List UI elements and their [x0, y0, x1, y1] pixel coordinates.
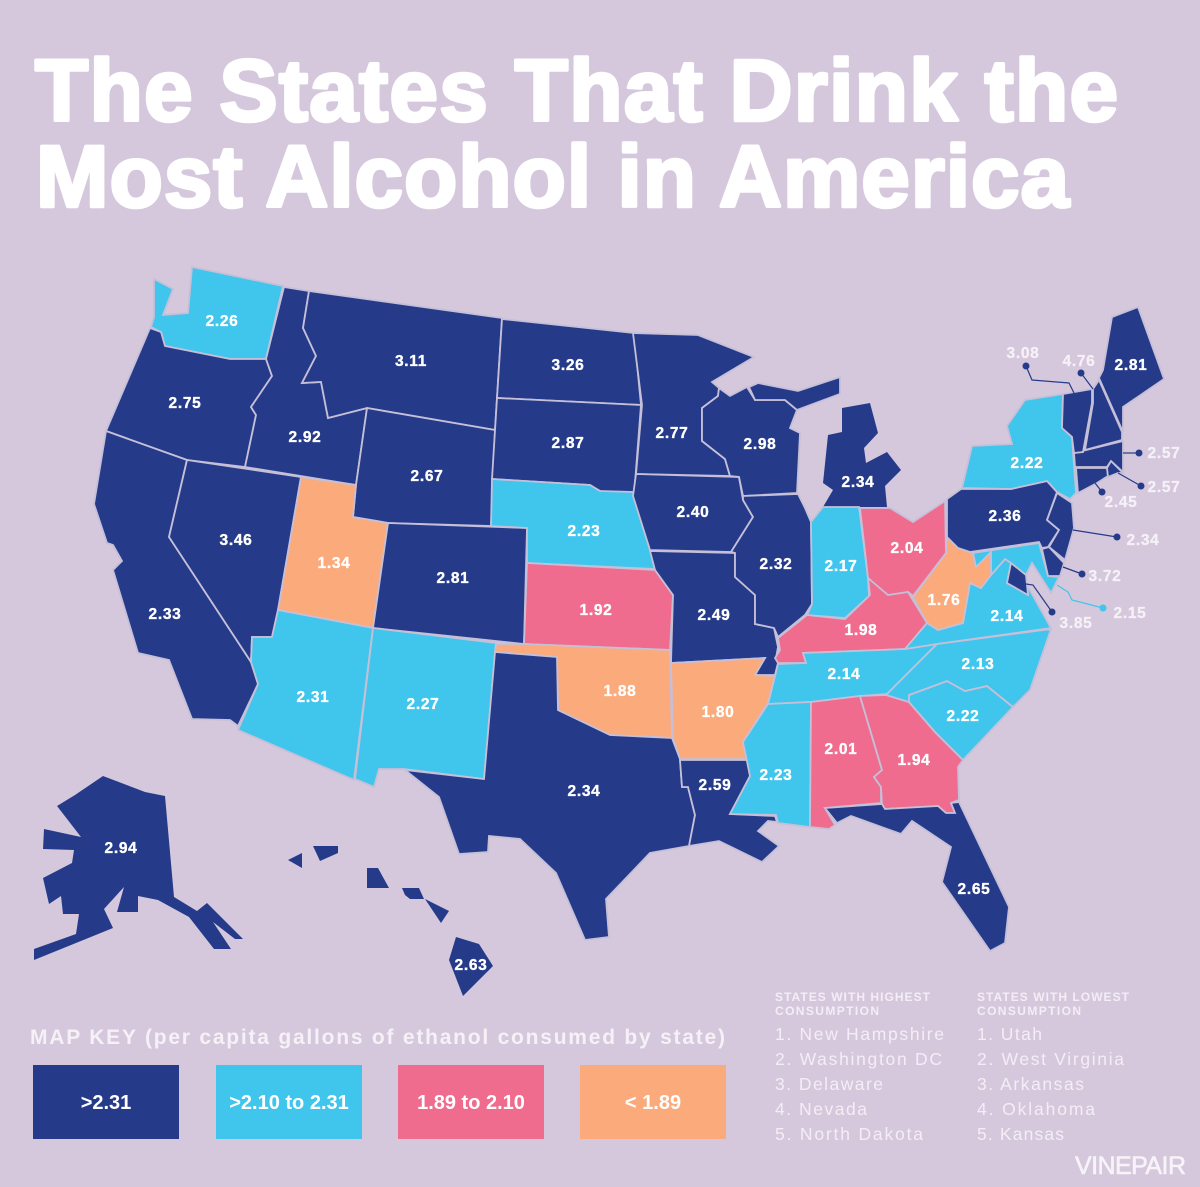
state: Florida — [825, 802, 1009, 951]
state: Arkansas — [671, 658, 775, 759]
callout: Rhode Island 2.57: 2.57 — [1148, 479, 1180, 496]
key: second band — [216, 1065, 362, 1139]
state: Illinois — [731, 494, 812, 637]
state: Nebraska — [491, 479, 655, 569]
state: Louisiana — [680, 760, 779, 862]
state: Washington DC — [1007, 563, 1028, 595]
state: Vermont — [1062, 389, 1092, 453]
list: states with lowest consumption: 3. Arkansas — [977, 1074, 1084, 1094]
state: Virginia: 2.14 — [991, 608, 1023, 625]
state: Missouri: 2.49 — [698, 607, 730, 624]
callout: New Jersey 2.34 — [1073, 530, 1159, 549]
title: The States That Drink the — [35, 42, 1118, 140]
state: California — [94, 431, 258, 726]
state: New Jersey — [1047, 493, 1074, 560]
key: lowest band: < 1.89 — [625, 1092, 681, 1114]
state: Minnesota: 2.77 — [656, 425, 688, 442]
state: Massachusetts — [1074, 441, 1123, 472]
state: North Carolina — [886, 629, 1051, 707]
state: Wisconsin — [702, 387, 800, 496]
state: South Carolina: 2.22 — [947, 708, 979, 725]
state: Maine: 2.81 — [1115, 357, 1147, 374]
state: Georgia: 1.94 — [898, 752, 930, 769]
title: Most Alcohol in America — [36, 128, 1070, 226]
state: North Carolina: 2.13 — [962, 656, 994, 673]
state: Maine — [1099, 307, 1164, 432]
list: states with highest consumption: 2. Washington DC — [775, 1049, 942, 1069]
state: Washington: 2.26 — [206, 313, 238, 330]
state: Missouri — [650, 551, 778, 675]
state: Minnesota — [633, 333, 754, 476]
state: Oregon: 2.75 — [169, 395, 201, 412]
state: Mississippi: 2.23 — [760, 767, 792, 784]
state: Illinois: 2.32 — [760, 556, 792, 573]
callout: Washington DC 3.85 — [1026, 584, 1092, 632]
state: Georgia — [860, 695, 963, 813]
state: Michigan: 2.34 — [842, 474, 874, 491]
state: Kentucky — [775, 578, 927, 663]
state: Wyoming — [353, 408, 495, 526]
state: Mississippi — [730, 702, 811, 827]
state: Florida: 2.65 — [958, 881, 990, 898]
state: California: 2.33 — [149, 606, 181, 623]
callout: Massachusetts 2.57 — [1123, 445, 1180, 462]
key: second band: >2.10 to 2.31 — [229, 1092, 349, 1114]
state: Hawaii — [288, 846, 493, 996]
callout: Vermont 3.08: 3.08 — [1007, 345, 1039, 362]
state: Hawaii: 2.63 — [455, 957, 487, 974]
state: Alaska — [34, 776, 243, 960]
state: Kansas: 1.92 — [580, 602, 612, 619]
state: Nevada: 3.46 — [220, 532, 252, 549]
state: South Dakota — [492, 398, 641, 496]
state: Pennsylvania: 2.36 — [989, 508, 1021, 525]
list: states with highest consumption: 4. Nevada — [775, 1099, 867, 1119]
state: Tennessee: 2.14 — [828, 666, 860, 683]
callout: New Jersey 2.34: 2.34 — [1127, 532, 1159, 549]
key: highest band: >2.31 — [81, 1092, 131, 1114]
list: states with highest consumption: STATES WITH HIGHEST — [775, 990, 931, 1004]
state: North Dakota: 3.26 — [552, 357, 584, 374]
state: Arizona: 2.31 — [297, 689, 329, 706]
state: Ohio — [860, 501, 946, 596]
state: Colorado: 2.81 — [437, 570, 469, 587]
state: New Mexico: 2.27 — [407, 696, 439, 713]
callout: Connecticut 2.45: 2.45 — [1105, 494, 1137, 511]
state: New York — [962, 394, 1076, 499]
state: Rhode Island — [1107, 461, 1123, 477]
list: states with highest consumption: CONSUMPTION — [775, 1004, 879, 1018]
state: Washington — [151, 267, 283, 359]
list: states with lowest consumption: 1. Utah — [977, 1024, 1042, 1044]
state: Texas — [405, 652, 695, 940]
state: Arizona — [238, 610, 373, 780]
state: South Carolina — [909, 681, 1013, 760]
map of contiguous states — [94, 267, 1164, 951]
map key heading: MAP KEY (per capita gallons of ethanol consumed by state) — [30, 1026, 725, 1049]
key: highest band — [33, 1065, 179, 1139]
state: Oregon — [106, 328, 272, 467]
state: Kansas — [524, 563, 673, 650]
leader lines and outside labels for small states — [1007, 345, 1180, 632]
state: West Virginia — [913, 537, 991, 630]
state: Colorado — [373, 523, 527, 644]
state: Kentucky: 1.98 — [845, 622, 877, 639]
state: New Hampshire — [1085, 380, 1122, 450]
callout: Connecticut 2.45 — [1095, 483, 1137, 511]
state: New Mexico — [355, 628, 496, 787]
state: Michigan upper peninsula — [749, 377, 840, 410]
callout: Washington DC 3.85: 3.85 — [1060, 615, 1092, 632]
key: third band — [398, 1065, 544, 1139]
state: Ohio: 2.04 — [891, 540, 923, 557]
callout: New Hampshire 4.76 — [1063, 353, 1095, 389]
state: South Dakota: 2.87 — [552, 435, 584, 452]
state: Nevada — [169, 460, 301, 662]
state: Tennessee — [768, 644, 937, 704]
state: Iowa: 2.40 — [677, 504, 709, 521]
map key swatches — [33, 1065, 726, 1139]
state: Montana: 3.11 — [395, 353, 427, 370]
state: Texas: 2.34 — [568, 783, 600, 800]
callout: New Hampshire 4.76: 4.76 — [1063, 353, 1095, 370]
title — [35, 42, 1118, 226]
state: Oklahoma — [495, 644, 672, 738]
state: Indiana: 2.17 — [825, 558, 857, 575]
state: Michigan — [823, 403, 901, 507]
list: states with highest consumption — [775, 990, 944, 1144]
state: Idaho: 2.92 — [289, 429, 321, 446]
callout: Vermont 3.08 — [1007, 345, 1074, 393]
list: states with highest consumption: 3. Delaware — [775, 1074, 883, 1094]
state: Virginia — [905, 559, 1051, 649]
key: third band: 1.89 to 2.10 — [417, 1092, 525, 1114]
state: Louisiana: 2.59 — [699, 777, 731, 794]
key: lowest band — [580, 1065, 726, 1139]
list: states with lowest consumption: 5. Kansas — [977, 1124, 1064, 1144]
state: Wyoming: 2.67 — [411, 468, 443, 485]
state: Idaho — [245, 287, 367, 485]
state: Maryland — [973, 543, 1059, 593]
state: Oklahoma: 1.88 — [604, 683, 636, 700]
list: states with lowest consumption — [977, 990, 1130, 1144]
state: Alabama: 2.01 — [825, 741, 857, 758]
logo: VinePair: VINEPAIR — [1075, 1152, 1186, 1180]
state: Connecticut — [1076, 468, 1108, 493]
state: Arkansas: 1.80 — [702, 704, 734, 721]
state: Alabama — [810, 696, 882, 829]
list: states with lowest consumption: CONSUMPTION — [977, 1004, 1081, 1018]
list: states with lowest consumption: 2. West Virginia — [977, 1049, 1124, 1069]
list: states with lowest consumption: STATES WITH LOWEST — [977, 990, 1130, 1004]
state: Utah: 1.34 — [318, 555, 350, 572]
state: Montana — [302, 291, 502, 430]
state: West Virginia: 1.76 — [928, 592, 960, 609]
state: Pennsylvania — [947, 481, 1059, 552]
callout: Maryland 2.15: 2.15 — [1114, 605, 1146, 622]
list: states with lowest consumption: 4. Oklahoma — [977, 1099, 1095, 1119]
state: Nebraska: 2.23 — [568, 523, 600, 540]
callout: Maryland 2.15 — [1057, 585, 1146, 622]
callout: Delaware 3.72 — [1063, 567, 1121, 585]
state: Iowa — [633, 474, 753, 552]
state: Alaska: 2.94 — [105, 840, 137, 857]
state: New York: 2.22 — [1011, 455, 1043, 472]
callout: Rhode Island 2.57 — [1118, 473, 1180, 496]
state: Utah — [278, 477, 388, 628]
callout: Massachusetts 2.57: 2.57 — [1148, 445, 1180, 462]
state: Delaware — [1042, 547, 1064, 576]
state: Indiana — [807, 507, 869, 618]
list: states with highest consumption: 1. New Hampshire — [775, 1024, 944, 1044]
state: North Dakota — [497, 319, 641, 405]
list: states with highest consumption: 5. North Dakota — [775, 1124, 923, 1144]
state: Wisconsin: 2.98 — [744, 436, 776, 453]
callout: Delaware 3.72: 3.72 — [1089, 568, 1121, 585]
